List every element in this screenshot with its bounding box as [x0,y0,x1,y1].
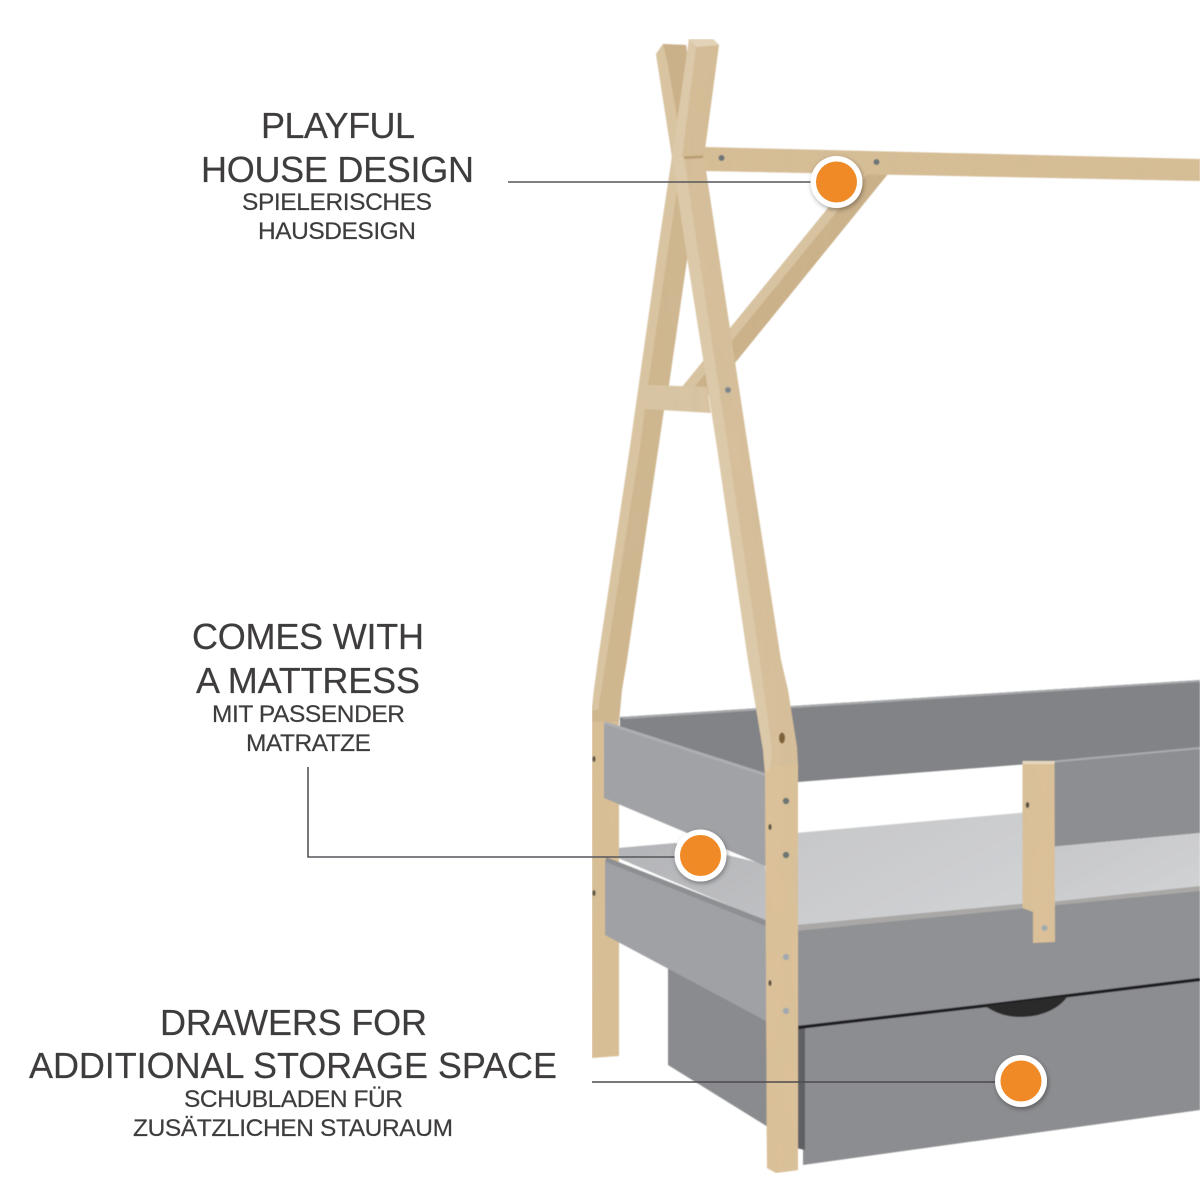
text block: drawers for additional storage space: ZUSÄTZLICHEN STAURAUM [133,1115,453,1142]
marker: house design [810,156,862,208]
illustration: tent-frame house bed [592,39,1200,1173]
text block: playful house design: HOUSE DESIGN [201,149,474,190]
text block: playful house design [201,105,474,245]
mattress [618,812,1200,934]
ridge beam [704,147,1200,181]
text block: drawers for additional storage space [29,1002,557,1142]
text block: drawers for additional storage space: ADDITIONAL STORAGE SPACE [29,1045,557,1086]
text block: comes with a mattress: MATRATZE [246,730,371,757]
screws [592,155,1048,1014]
right side guard rail [1050,747,1200,847]
drawer top gap [798,980,1200,1028]
text block: comes with a mattress: MIT PASSENDER [212,701,405,728]
text block: drawers for additional storage space: SCHUBLADEN FÜR [184,1086,403,1113]
callout line: mattress [308,767,676,857]
callout line: drawers [592,1081,996,1083]
drawer front [796,980,1200,1165]
left bed post [592,705,619,1058]
text block: comes with a mattress: A MATTRESS [196,660,420,701]
drawer handle cutout [985,996,1068,1017]
text block: playful house design: SPIELERISCHES [242,189,432,216]
tent frame wood [592,39,1200,1173]
text block: comes with a mattress: COMES WITH [192,616,424,657]
text block: drawers for additional storage space: DRAWERS FOR [160,1002,427,1043]
drawer side [668,960,768,1127]
leg A top [672,39,719,159]
leg hole [779,732,785,744]
back panel of bed [620,680,1200,782]
marker: drawers [995,1055,1047,1107]
leg B [656,44,798,1173]
marker: mattress [674,830,726,882]
text block: playful house design: HAUSDESIGN [258,218,416,245]
diagonal brace [682,170,888,400]
crossbar [645,385,711,413]
text block: playful house design: PLAYFUL [261,105,415,146]
headboard [604,721,768,867]
text block: comes with a mattress [192,616,424,757]
callout line: house design [508,181,812,183]
lower bed frame [605,857,1200,1028]
leg A lower [592,157,704,722]
front-side stake [1022,761,1055,943]
